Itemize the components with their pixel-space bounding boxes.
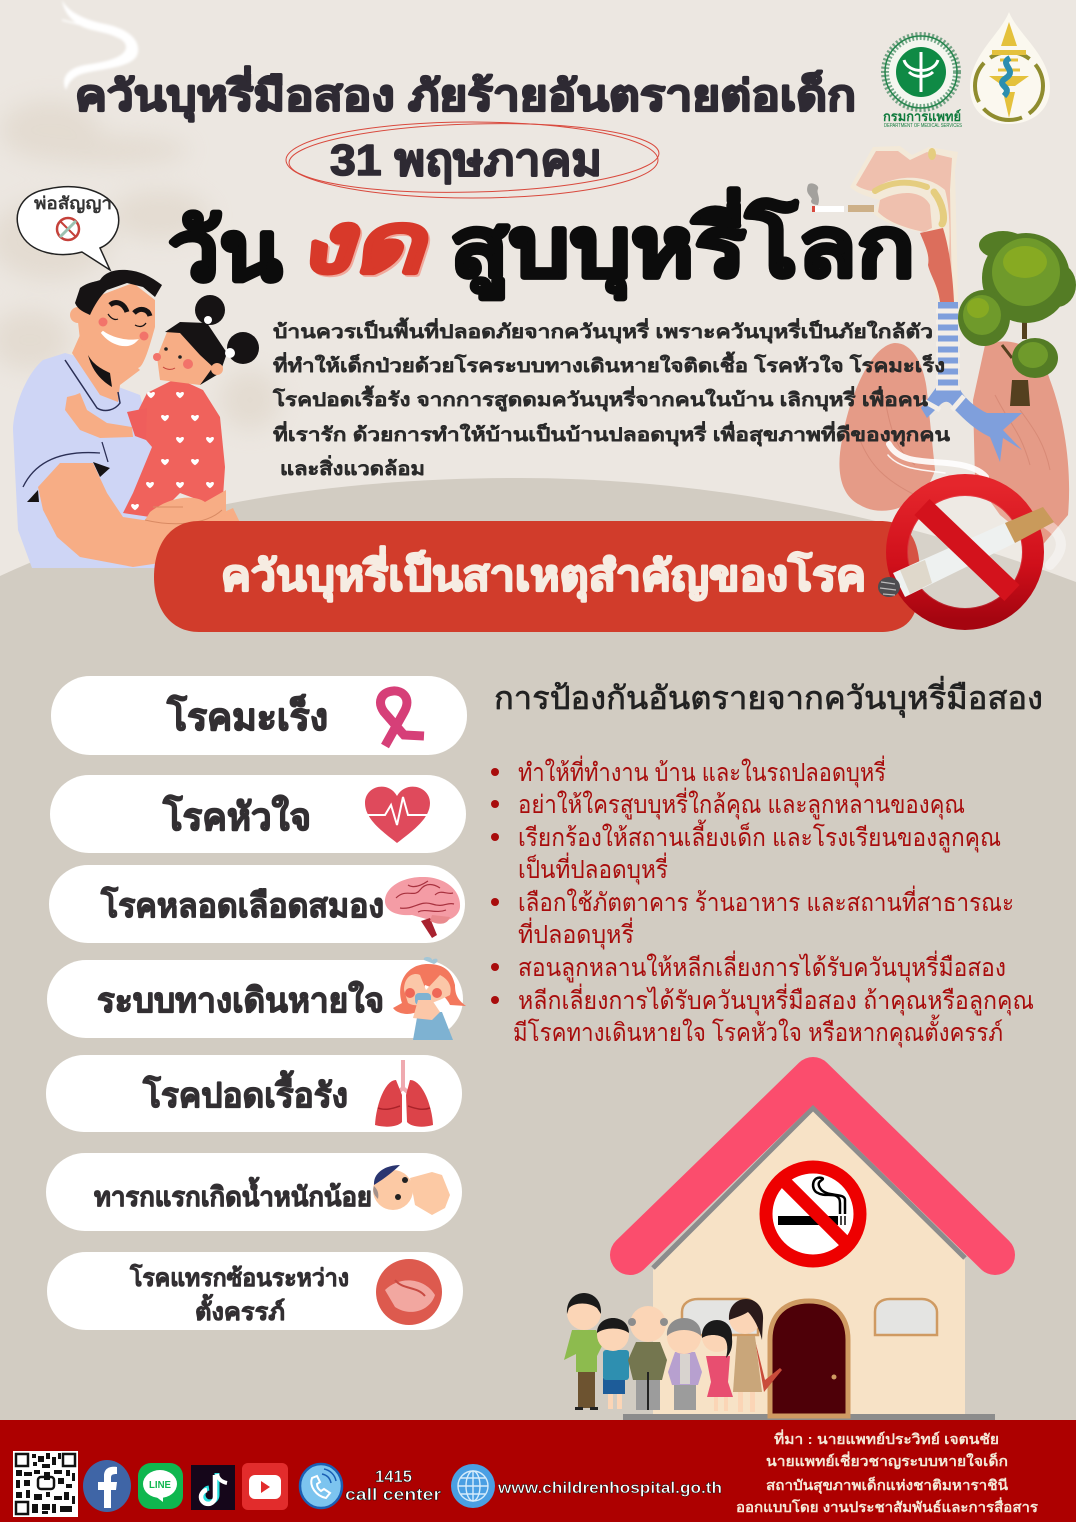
smoke from lungs	[888, 444, 1061, 565]
pill: heart disease: โรคหัวใจ	[162, 794, 311, 839]
logo: department of medical services: กรมการแพทย์	[883, 109, 961, 124]
body paragraph: ที่เรารัก ด้วยการทำให้บ้านเป็นบ้านปลอดบุหรี่ เพื่อสุขภาพที่ดีของทุกคน	[273, 421, 950, 447]
banner: smoke is a major cause of disease: ควันบุหรี่เป็นสาเหตุสำคัญของโรค	[221, 546, 866, 602]
icon: facebook	[83, 1460, 131, 1512]
body paragraph: บ้านควรเป็นพื้นที่ปลอดภัยจากควันบุหรี่ เพราะควันบุหรี่เป็นภัยใกล้ตัว	[273, 317, 933, 344]
pill: stroke	[49, 865, 465, 943]
banner: smoke is a major cause of disease	[154, 521, 920, 632]
prevention list	[491, 755, 1034, 1048]
prevention list: หลีกเลี่ยงการได้รับควันบุหรี่มือสอง ถ้าคุณหรือลูกคุณ	[518, 983, 1034, 1016]
prevention list: ทำให้ที่ทำงาน บ้าน และในรถปลอดบุหรี่	[518, 755, 886, 788]
body paragraph: ที่ทำให้เด็กป่วยด้วยโรคระบบทางเดินหายใจติดเชื้อ โรคหัวใจ โรคมะเร็ง	[273, 351, 945, 377]
logo: department of medical services	[883, 36, 963, 129]
baby arm	[65, 393, 133, 438]
icon: line	[138, 1463, 183, 1509]
pill: pregnancy complications	[47, 1252, 463, 1330]
smoke wisp	[62, 0, 138, 90]
mother	[729, 1299, 782, 1412]
logo: children's hospital	[970, 12, 1050, 124]
pill: cancer: โรคมะเร็ง	[166, 694, 328, 739]
grandfather	[628, 1306, 668, 1410]
prevention list: เป็นที่ปลอดบุหรี่	[518, 852, 668, 885]
window left	[682, 1299, 758, 1335]
icon: tiktok	[191, 1465, 235, 1510]
pill: pregnancy complications: โรคแทรกซ้อนระหว่าง	[129, 1263, 349, 1292]
call center text: call center	[345, 1485, 441, 1504]
date circled: 31 May: 31 พฤษภาคม	[330, 136, 602, 185]
body paragraph: และสิ่งแวดล้อม	[280, 455, 425, 480]
left lung	[839, 343, 935, 511]
sleeve lines	[23, 442, 108, 487]
headline: world no tobacco day	[168, 188, 915, 300]
headline: world no tobacco day: วัน	[168, 204, 282, 298]
family group	[564, 1293, 782, 1412]
heading: prevention of secondhand smoke: การป้องกันอันตรายจากควันบุหรี่มือสอง	[494, 676, 1043, 718]
son	[597, 1318, 629, 1409]
QR code	[13, 1451, 78, 1517]
icon: no smoking sign	[766, 1167, 860, 1261]
footer band	[0, 1420, 1076, 1522]
lower background curve	[0, 478, 1076, 1522]
collar	[65, 360, 120, 410]
pill: low birth weight: ทารกแรกเกิดน้ำหนักน้อย	[94, 1176, 372, 1212]
beard	[88, 355, 112, 387]
icon: globe	[451, 1464, 495, 1508]
right lung	[973, 341, 1069, 548]
logo: department of medical services: DEPARTMENT OF MEDICAL SERVICES	[884, 123, 963, 129]
source credit: ออกแบบโดย งานประชาสัมพันธ์และการสื่อสาร	[736, 1497, 1039, 1515]
call center text	[345, 1467, 441, 1504]
source credit	[736, 1429, 1039, 1515]
list of diseases	[46, 676, 467, 1330]
shirt	[13, 353, 155, 568]
pill: chronic lung	[46, 1055, 462, 1132]
baby dress	[123, 378, 225, 517]
pill: respiratory	[47, 957, 466, 1040]
prevention list: มีโรคทางเดินหายใจ โรคหัวใจ หรือหากคุณตั้งครรภ์	[513, 1014, 1003, 1048]
prevention list: เลือกใช้ภัตตาคาร ร้านอาหาร และสถานที่สาธารณะ	[518, 885, 1014, 917]
pill: chronic lung: โรคปอดเรื้อรัง	[142, 1070, 348, 1115]
illustration: father holding child	[13, 270, 259, 568]
call center text: 1415	[375, 1467, 412, 1486]
trachea and bronchi	[921, 302, 1022, 462]
pill: respiratory: ระบบทางเดินหายใจ	[97, 980, 384, 1020]
pill: low birth weight	[46, 1153, 462, 1231]
icon: youtube	[242, 1463, 288, 1510]
pill: cancer	[51, 676, 467, 755]
prevention list: ที่ปลอดบุหรี่	[518, 917, 634, 950]
head profile	[850, 146, 958, 302]
prevention list: อย่าให้ใครสูบบุหรี่ใกล้คุณ และลูกหลานของคุณ	[518, 787, 965, 820]
icon: cigarette in mouth	[807, 183, 874, 212]
window right	[875, 1299, 937, 1335]
website text: www.childrenhospital.go.th	[497, 1480, 722, 1497]
hair	[75, 270, 162, 315]
baby head	[157, 328, 223, 385]
father	[564, 1293, 603, 1410]
prevention list: เรียกร้องให้สถานเลี้ยงเด็ก และโรงเรียนของลูกคุณ	[518, 819, 1001, 853]
hearts	[131, 392, 214, 510]
date circled: 31 May	[286, 119, 660, 198]
illustration: lungs and airway with tree	[807, 146, 1076, 565]
illustration: tree	[958, 231, 1076, 406]
source credit: นายแพทย์เชี่ยวชาญระบบหายใจเด็ก	[766, 1451, 1008, 1470]
door	[770, 1301, 848, 1416]
headline: world no tobacco day: งด	[300, 198, 431, 292]
title: secondhand smoke: ควันบุหรี่มือสอง ภัยร้ายอันตรายต่อเด็ก	[75, 66, 856, 122]
headline: world no tobacco day: งด	[298, 196, 429, 290]
body paragraph: โรคปอดเรื้อรัง จากการสูดดมควันบุหรี่จากคนในบ้าน เลิกบุหรี่ เพื่อคน	[272, 385, 928, 412]
speech bubble: dad's promise: พ่อสัญญา	[34, 194, 112, 214]
girl	[702, 1320, 733, 1411]
icon: phone	[300, 1464, 342, 1508]
grandmother	[667, 1318, 702, 1410]
body paragraph	[272, 317, 950, 480]
pill: stroke: โรคหลอดเลือดสมอง	[100, 886, 384, 924]
pill: heart disease	[50, 775, 466, 853]
illustration: smoke free house	[564, 1077, 995, 1420]
neck	[72, 330, 140, 402]
source credit: สถาบันสุขภาพเด็กแห่งชาติมหาราชินี	[766, 1476, 1008, 1494]
headline: world no tobacco day: สูบบุหรี่โลก	[450, 188, 915, 300]
father forearm	[38, 463, 245, 567]
source credit: ที่มา : นายแพทย์ประวิทย์ เจตนชัย	[774, 1429, 999, 1447]
face	[77, 283, 155, 373]
pill: pregnancy complications: ตั้งครรภ์	[195, 1293, 285, 1326]
prevention list: สอนลูกหลานให้หลีกเลี่ยงการได้รับควันบุหรี่มือสอง	[518, 950, 1006, 983]
icon: no smoking cigarette sign	[878, 485, 1054, 619]
icon: line: LINE	[149, 1480, 171, 1491]
speech bubble: dad's promise	[17, 187, 119, 270]
